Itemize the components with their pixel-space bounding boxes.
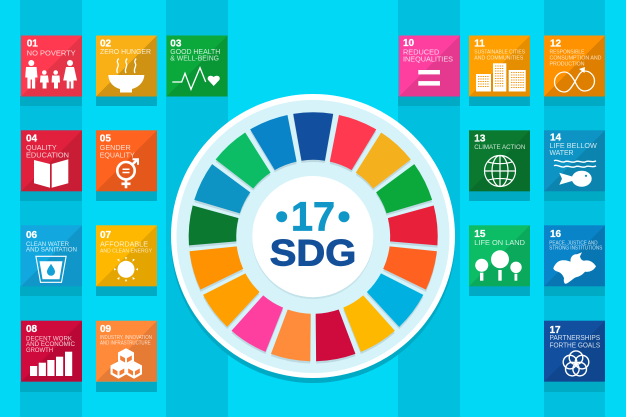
tile 16 peace and justice <box>544 225 605 286</box>
tile 04 quality education: 04 <box>26 133 38 144</box>
tile 14 life below water: 14 <box>550 132 562 143</box>
centre circle <box>252 176 373 297</box>
centre title: 17 SDG <box>270 194 356 273</box>
tile 01 no poverty <box>21 36 82 96</box>
tile 05 gender equality: 05 <box>100 133 111 144</box>
tile 08 decent work: GROWTH <box>26 347 53 354</box>
tile 09 industry: INDUSTRY, INNOVATION <box>100 335 152 341</box>
tile 12 responsible consumption: RESPONSIBLE <box>550 50 585 56</box>
tile 14 life below water: LIFE BELLOW <box>550 141 597 150</box>
tile 05 gender equality: EQUALITY <box>100 151 135 160</box>
tile 02 zero hunger: ZERO HUNGER <box>100 47 151 56</box>
tile 10 reduced inequalities: INEQUALITIES <box>403 55 453 64</box>
tile 07 affordable energy: 07 <box>100 230 112 241</box>
wheel shadow <box>171 99 455 383</box>
tile 05 gender equality <box>96 130 157 191</box>
tile 02 zero hunger <box>96 36 157 96</box>
icon: waves and fish <box>554 160 596 187</box>
tile 11 sustainable cities: SUSTAINABLE CITIES <box>474 50 526 56</box>
tile 03 good health <box>166 36 228 96</box>
tile 10 reduced inequalities: REDUCED <box>403 48 439 57</box>
tile 15 life on land: 15 <box>474 229 486 240</box>
tile shadows <box>20 96 605 392</box>
tile 06 clean water <box>21 225 82 286</box>
tile 08 decent work: DECENT WORK <box>26 335 73 342</box>
centre title: 17 SDG: SDG <box>270 231 356 273</box>
icon: globe <box>484 156 516 186</box>
wheel outer ring <box>171 94 455 378</box>
icon: trees <box>475 250 522 281</box>
icon: buildings <box>476 63 526 92</box>
tile 11 sustainable cities: AND COMMUNITIES <box>474 56 524 62</box>
segment shadows <box>187 114 439 365</box>
tile 15 life on land: LIFE ON LAND <box>474 238 525 247</box>
tile 01 no poverty: 01 <box>27 39 38 50</box>
icon: flower rings <box>563 351 589 376</box>
tile 04 quality education: QUALITY <box>26 143 57 152</box>
tile 13 climate action: 13 <box>474 134 486 145</box>
tile 04 quality education <box>21 130 82 191</box>
tile 13 climate action <box>469 130 530 191</box>
icon: cubes <box>110 348 142 379</box>
tile 11 sustainable cities: 11 <box>474 38 485 49</box>
icon: soup bowl <box>108 58 144 92</box>
tile 03 good health: & WELL-BEING <box>170 54 219 63</box>
tile 14 life below water <box>544 130 605 191</box>
tile 10 reduced inequalities <box>399 36 460 96</box>
icon: sun <box>114 257 138 281</box>
tile 08 decent work <box>21 321 82 382</box>
tile 09 industry: 09 <box>100 324 112 335</box>
icon: recycling loop <box>554 67 594 92</box>
tile 09 industry <box>96 321 157 382</box>
tile 03 good health: 03 <box>170 39 182 50</box>
tile 02 zero hunger: 02 <box>100 39 112 50</box>
tile 12 responsible consumption <box>544 36 605 96</box>
centre circle shadow <box>252 178 373 299</box>
wheel <box>171 94 455 383</box>
tile 06 clean water: CLEAN WATER <box>26 241 70 248</box>
tile 05 gender equality: GENDER <box>100 143 131 152</box>
tile 14 life below water: WATER <box>550 148 574 157</box>
tile 12 responsible consumption: CONSUMPTION AND <box>550 55 602 61</box>
tile 17 partnerships <box>544 321 605 382</box>
tile 15 life on land <box>469 225 530 286</box>
tile 08 decent work: 08 <box>26 324 38 335</box>
tile 04 quality education: EDUCATION <box>26 150 69 159</box>
icon: dove <box>553 252 596 284</box>
icon: family <box>25 60 77 88</box>
tile 11 sustainable cities <box>469 36 530 96</box>
tile 01 no poverty: NO POVERTY <box>27 48 76 57</box>
icon: water glass <box>36 256 66 282</box>
tile 17 partnerships: 17 <box>550 325 561 336</box>
icon: pulse and heart <box>172 68 220 89</box>
tile 03 good health: GOOD HEALTH <box>170 47 220 56</box>
tile 16 peace and justice: STRONG INSTITUTIONS <box>549 246 603 252</box>
tile 13 climate action: CLIMATE ACTION <box>474 144 526 151</box>
icon: gender symbol <box>117 159 138 188</box>
tile 07 affordable energy: AFFORDABLE <box>100 240 148 249</box>
icon: book <box>34 159 68 188</box>
centre title: 17 SDG: 17 <box>291 194 335 240</box>
tile 12 responsible consumption: 12 <box>550 38 562 49</box>
tile 17 partnerships: PARTNERSHIPS <box>550 333 600 342</box>
tile 06 clean water: AND SANITATION <box>26 247 77 254</box>
tile 07 affordable energy <box>96 225 157 286</box>
tile 06 clean water: 06 <box>26 230 38 241</box>
tile 08 decent work: AND ECONOMIC <box>26 341 76 348</box>
coloured segments <box>187 112 439 363</box>
icon: equals <box>418 70 440 86</box>
tile 17 partnerships: FORTHE GOALS <box>550 340 600 349</box>
tile 12 responsible consumption: PRODUCTION <box>550 61 585 67</box>
icon: bar chart <box>30 352 72 376</box>
tile 16 peace and justice: 16 <box>550 229 562 240</box>
tile 16 peace and justice: PEACE, JUSTICE AND <box>549 240 598 246</box>
tile 09 industry: AND INFRASTRUCTURE <box>100 340 151 346</box>
wheel inner disc <box>176 100 450 373</box>
tile 07 affordable energy: AND CLEAN ENERGY <box>100 249 153 255</box>
tile 10 reduced inequalities: 10 <box>403 38 415 49</box>
